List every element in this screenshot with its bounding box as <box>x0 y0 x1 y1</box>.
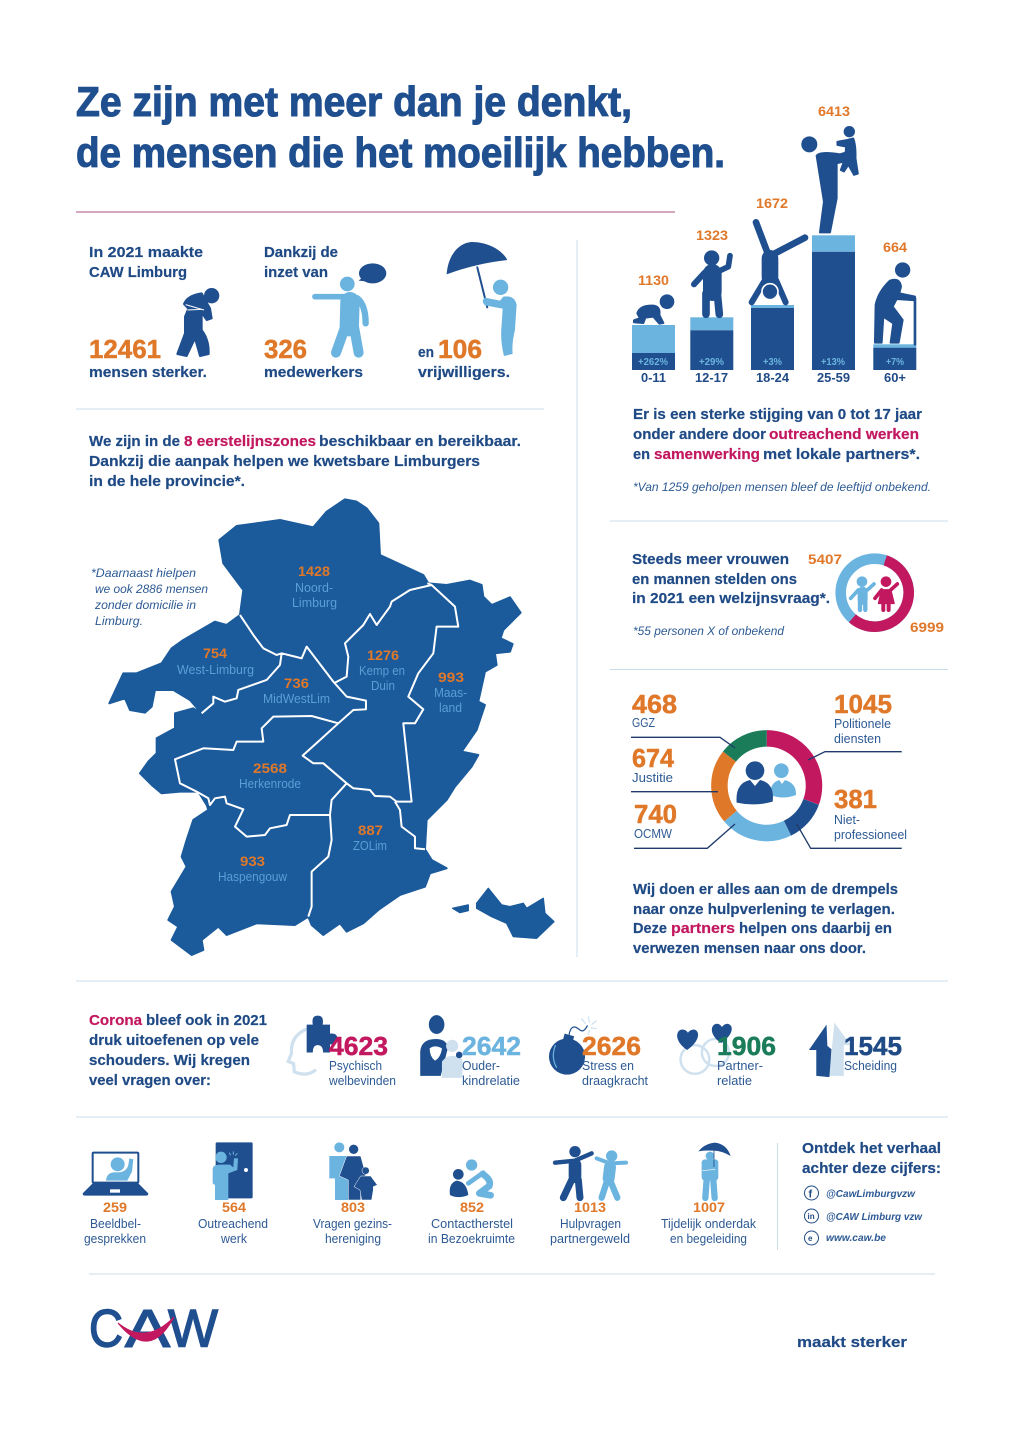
text block: age finding: outreachend werken <box>769 426 919 443</box>
panel: social links <box>802 1140 941 1245</box>
icon: hearts and rings <box>677 1024 732 1074</box>
icon: parent and child <box>420 1015 462 1078</box>
zone: Maasland <box>434 669 467 715</box>
zone: West-Limburg <box>177 645 254 677</box>
icon: boy and girl <box>851 576 897 610</box>
text block: age finding <box>633 406 931 494</box>
stat: partnerrelatie: Partner- <box>717 1059 763 1073</box>
stat: stress en draagkracht: draagkracht <box>582 1074 649 1088</box>
stat: stress en draagkracht: 2626 <box>582 1031 641 1061</box>
title: de mensen die het moeilijk hebben. <box>76 129 725 176</box>
icon: family <box>329 1142 377 1200</box>
text block: partners paragraph: partners <box>671 920 735 937</box>
panel: volunteers: vrijwilligers. <box>418 364 510 381</box>
panel: referring partners: Politionele <box>834 717 891 731</box>
text block: zones intro: We zijn in de <box>89 433 180 450</box>
zone: Haspengouw <box>218 853 288 884</box>
panel: women and men: *55 personen X of onbekend <box>633 624 784 638</box>
stat: contactherstel <box>428 1159 515 1246</box>
stat: partnerrelatie: relatie <box>717 1074 752 1088</box>
panel: women and men: Steeds meer vrouwen <box>632 551 789 568</box>
zone: Herkenrode <box>239 760 301 791</box>
zone: Noord-Limburg: Limburg <box>292 596 337 610</box>
bar: 0-11 <box>632 272 675 385</box>
stat: gezinshereniging: Vragen gezins- <box>313 1217 392 1231</box>
panel: people helped: 12461 <box>89 334 161 364</box>
zone: MidWestLim: 736 <box>284 675 309 691</box>
text block: zones intro: 8 eerstelijnszones <box>184 433 316 450</box>
panel: social links: Ontdek het verhaal <box>802 1140 941 1157</box>
stat: stress en draagkracht: Stress en <box>582 1059 634 1073</box>
panel: referring partners: GGZ <box>632 716 655 730</box>
bar: 25-59 <box>812 103 855 385</box>
bar: 60+ <box>873 239 916 385</box>
panel: referring partners: 740 <box>634 799 677 829</box>
panel: referring partners: 381 <box>834 784 877 814</box>
icon: age figures <box>634 126 915 344</box>
stat: onderdak <box>661 1143 757 1246</box>
text block: age finding: onder andere door <box>633 426 766 443</box>
icon: person under umbrella <box>698 1143 731 1198</box>
stat: partnergeweld <box>550 1146 630 1246</box>
icon: linkedin: in <box>808 1212 815 1221</box>
text block: corona <box>89 1012 267 1089</box>
panel: volunteers: 106 <box>438 334 482 364</box>
text block: age finding: *Van 1259 geholpen mensen bleef de leeftijd onbekend. <box>633 480 931 494</box>
title <box>76 78 725 176</box>
zone: Kemp en Duin: Duin <box>371 679 395 693</box>
logo: CAW: C <box>89 1300 123 1358</box>
zone: Maasland: 993 <box>438 669 464 685</box>
zone: Kemp en Duin: 1276 <box>367 647 399 663</box>
panel: women and men: en mannen stelden ons <box>632 571 797 588</box>
stat: contactherstel: Contactherstel <box>431 1217 513 1231</box>
stat: gezinshereniging: 803 <box>341 1199 365 1215</box>
leader lines <box>631 737 902 848</box>
icon: two people <box>736 761 796 804</box>
panel: referring partners: OCMW <box>634 827 672 841</box>
icon: person with umbrella <box>447 242 517 356</box>
panel: people helped <box>89 244 219 381</box>
zone: MidWestLim <box>263 675 330 706</box>
zone: MidWestLim: MidWestLim <box>263 692 330 706</box>
stat: psychisch welbevinden: welbevinden <box>328 1074 396 1088</box>
icon: facebook: f <box>808 1188 812 1200</box>
stat: partnerrelatie <box>677 1024 776 1088</box>
stat: beeldbelgesprekken: gesprekken <box>84 1232 146 1246</box>
stat: partnergeweld: Hulpvragen <box>560 1217 621 1231</box>
panel: volunteers <box>418 242 517 381</box>
stat: beeldbelgesprekken: Beeldbel- <box>90 1217 141 1231</box>
bar: 12-17 <box>690 227 733 385</box>
panel: referring partners: Niet- <box>834 813 860 827</box>
bar: 25-59: 25-59 <box>817 370 850 385</box>
stat: outreachend werk: werk <box>220 1232 248 1246</box>
bar: 12-17: +29% <box>699 357 724 368</box>
bar: 0-11: 0-11 <box>641 370 666 385</box>
text block: corona: bleef ook in 2021 <box>146 1012 267 1029</box>
bar: 12-17: 12-17 <box>695 370 728 385</box>
text block: age finding: Er is een sterke stijging van 0 tot 17 jaar <box>633 406 922 423</box>
zone: ZOLim <box>353 822 387 853</box>
stat: outreachend werk <box>198 1142 268 1246</box>
stat: beeldbelgesprekken <box>83 1153 148 1246</box>
text block: age finding: samenwerking <box>654 446 760 463</box>
text block: corona: druk uitoefenen op vele <box>89 1032 259 1049</box>
text block: partners paragraph: Wij doen er alles aan om de drempels <box>633 881 898 898</box>
panel: women and men: in 2021 een welzijnsvraag*. <box>632 590 830 607</box>
stat: ouder-kindrelatie <box>420 1015 521 1088</box>
panel: referring partners <box>631 689 907 852</box>
stat: gezinshereniging <box>313 1142 392 1246</box>
panel: referring partners: 674 <box>632 743 675 773</box>
text block: partners paragraph: naar onze hulpverlening te verlagen. <box>633 901 895 918</box>
bar: 25-59: 6413 <box>818 103 850 119</box>
icon: crouching people <box>450 1159 491 1197</box>
panel: staff: inzet van <box>264 264 328 281</box>
logo: CAW: W <box>168 1300 218 1358</box>
text block: map footnote: *Daarnaast hielpen <box>91 566 196 580</box>
bar chart: age groups <box>632 103 916 385</box>
text block: zones intro: Dankzij die aanpak helpen we kwetsbare Limburgers <box>89 453 480 470</box>
zone: Kemp en Duin <box>359 647 405 693</box>
icon: web: e <box>808 1234 813 1243</box>
icon: arguing couple <box>555 1146 626 1198</box>
logo: CAW: A <box>125 1300 171 1358</box>
bar: 60+: +7% <box>886 357 904 368</box>
logo: CAW <box>89 1300 218 1358</box>
panel: referring partners: professioneel <box>834 828 907 842</box>
stat: onderdak: en begeleiding <box>670 1232 747 1246</box>
text block: corona: veel vragen over: <box>89 1072 211 1089</box>
text block: partners paragraph: Deze <box>633 920 667 937</box>
icon: head with puzzle <box>288 1016 337 1074</box>
bar: 18-24 <box>751 195 794 385</box>
text block: partners paragraph: helpen ons daarbij en <box>739 920 892 937</box>
text block: map footnote: zonder domicilie in <box>94 598 196 612</box>
zone: West-Limburg: West-Limburg <box>177 663 254 677</box>
zone: Noord-Limburg: 1428 <box>298 563 330 579</box>
stat: ouder-kindrelatie: Ouder- <box>462 1059 500 1073</box>
text block: partners paragraph <box>633 881 898 957</box>
text block: age finding: en <box>633 446 650 463</box>
logo smile <box>118 1317 174 1341</box>
zone: Noord-Limburg <box>292 563 337 610</box>
zone: Kemp en Duin: Kemp en <box>359 664 405 678</box>
zone: Haspengouw: Haspengouw <box>218 870 288 884</box>
stat: stress en draagkracht <box>549 1016 649 1088</box>
stat: beeldbelgesprekken: 259 <box>103 1199 127 1215</box>
bar: 12-17: 1323 <box>696 227 728 243</box>
panel: women and men: 5407 <box>808 551 842 567</box>
stat: onderdak: 1007 <box>693 1199 725 1215</box>
panel: social links: @CAW Limburg vzw <box>826 1211 923 1223</box>
zone: Maasland: Maas- <box>434 686 467 700</box>
zone: West-Limburg: 754 <box>203 645 227 661</box>
stat: scheiding <box>809 1023 902 1077</box>
stat: contactherstel: in Bezoekruimte <box>428 1232 515 1246</box>
text block: map footnote: we ook 2886 mensen <box>95 582 208 596</box>
text block: partners paragraph: verwezen mensen naar ons door. <box>633 940 866 957</box>
bar: 60+: 60+ <box>884 370 906 385</box>
bar: 60+: 664 <box>883 239 907 255</box>
bar: 18-24: 18-24 <box>756 370 790 385</box>
icon: bomb <box>549 1016 597 1075</box>
zone: Maasland: land <box>439 701 462 715</box>
icon: speaking person <box>315 263 386 353</box>
zone: ZOLim: ZOLim <box>353 839 387 853</box>
stat: outreachend werk: 564 <box>222 1199 246 1215</box>
stat: scheiding: 1545 <box>844 1031 902 1061</box>
zone: Noord-Limburg: Noord- <box>295 581 333 595</box>
panel: staff <box>264 244 386 381</box>
panel: referring partners: 1045 <box>834 689 892 719</box>
stat: onderdak: Tijdelijk onderdak <box>661 1217 757 1231</box>
stat: contactherstel: 852 <box>460 1199 484 1215</box>
stat: psychisch welbevinden: Psychisch <box>329 1059 382 1073</box>
donut: gender <box>832 550 918 636</box>
text block: zones intro: beschikbaar en bereikbaar. <box>319 433 521 450</box>
panel: referring partners: Justitie <box>632 771 673 785</box>
stat: outreachend werk: Outreachend <box>198 1217 268 1231</box>
stat: psychisch welbevinden <box>288 1016 396 1088</box>
panel: social links: @CawLimburgvzw <box>826 1188 916 1200</box>
panel: social links: achter deze cijfers: <box>802 1160 941 1177</box>
bar: 18-24: +3% <box>763 357 782 368</box>
text block: map footnote <box>91 566 208 628</box>
text block: map footnote: Limburg. <box>95 614 143 628</box>
panel: staff: 326 <box>264 334 307 364</box>
panel: volunteers: en <box>418 344 434 361</box>
text block: corona: Corona <box>89 1012 143 1029</box>
text block: age finding: met lokale partners*. <box>763 446 920 463</box>
stat: scheiding: Scheiding <box>844 1059 897 1073</box>
bar: 0-11: 1130 <box>638 272 669 288</box>
zone: Herkenrode: Herkenrode <box>239 777 301 791</box>
bar: 25-59: +13% <box>821 357 845 368</box>
text block: zones intro: in de hele provincie*. <box>89 473 245 490</box>
title: Ze zijn met meer dan je denkt, <box>76 78 632 125</box>
panel: people helped: CAW Limburg <box>89 264 187 281</box>
panel: women and men <box>632 550 944 638</box>
text block: corona: schouders. Wij kregen <box>89 1052 250 1069</box>
panel: social links: www.caw.be <box>826 1232 886 1244</box>
bar: 0-11: +262% <box>638 357 668 368</box>
stat: ouder-kindrelatie: 2642 <box>462 1031 521 1061</box>
icon: laptop <box>83 1153 148 1196</box>
bar: 18-24: 1672 <box>756 195 788 211</box>
stat: partnergeweld: partnergeweld <box>550 1232 630 1246</box>
zone: Herkenrode: 2568 <box>253 760 287 776</box>
zone: Haspengouw: 933 <box>240 853 265 869</box>
stat: gezinshereniging: hereniging <box>325 1232 381 1246</box>
icon: bent person <box>177 288 219 356</box>
icon: split arrows <box>809 1023 851 1077</box>
panel: referring partners: 468 <box>632 689 677 719</box>
panel: staff: medewerkers <box>264 364 363 381</box>
panel: referring partners: diensten <box>834 732 881 746</box>
text block: zones intro <box>89 433 521 490</box>
icon: person at door <box>213 1142 253 1200</box>
donut: partners <box>700 719 833 852</box>
panel: people helped: mensen sterker. <box>89 364 207 381</box>
stat: partnergeweld: 1013 <box>574 1199 606 1215</box>
panel: people helped: In 2021 maakte <box>89 244 203 261</box>
stat: partnerrelatie: 1906 <box>717 1031 776 1061</box>
stat: psychisch welbevinden: 4623 <box>329 1031 388 1061</box>
zone: ZOLim: 887 <box>358 822 383 838</box>
map: Limburg zones <box>109 499 554 955</box>
panel: staff: Dankzij de <box>264 244 338 261</box>
panel: women and men: 6999 <box>910 619 944 635</box>
stat: ouder-kindrelatie: kindrelatie <box>462 1074 520 1088</box>
tagline: maakt sterker <box>797 1334 907 1351</box>
